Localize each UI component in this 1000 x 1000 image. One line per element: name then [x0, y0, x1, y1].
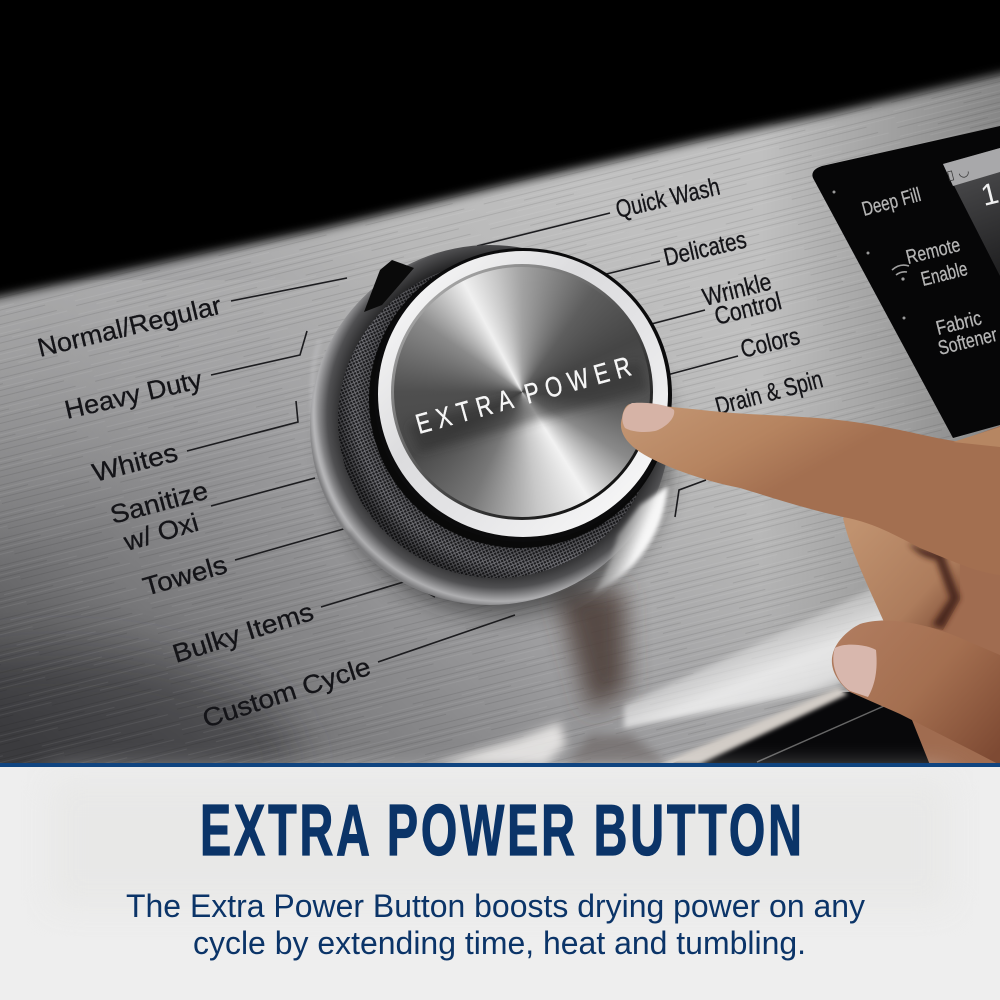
photo: washer control panel — [0, 66, 1000, 763]
bright lower band — [624, 585, 892, 728]
description: cycle by extending time, heat and tumbling. — [193, 925, 806, 961]
knurled body — [338, 262, 656, 578]
extra power dial — [310, 245, 672, 615]
black background with soft edge over the panel — [0, 0, 1000, 314]
lower finger — [832, 621, 1000, 765]
knuckle crease — [908, 543, 960, 628]
cycle labels right — [613, 173, 826, 421]
label leader lines — [187, 213, 738, 662]
chrome ring — [378, 251, 668, 537]
navy rule — [0, 763, 1000, 767]
dial base — [310, 245, 670, 605]
caption section background — [0, 767, 1000, 1000]
lower fingernail — [833, 645, 877, 697]
lower trim — [660, 688, 1000, 765]
cycle labels right: Colors — [738, 322, 803, 364]
cycle labels left: Heavy Duty — [62, 364, 205, 425]
cycle labels right: Delicates — [661, 226, 749, 272]
screen labels — [860, 184, 1000, 360]
index fingernail — [622, 403, 674, 432]
cycle labels left — [34, 290, 374, 734]
hand top edge — [953, 427, 1000, 447]
screen labels: Enable — [919, 258, 970, 291]
cycle labels left: w/ Oxi — [119, 507, 202, 557]
black lip under ring — [369, 250, 671, 548]
wifi icon — [892, 265, 909, 280]
index finger — [621, 404, 1000, 575]
cycle labels left: Custom Cycle — [199, 651, 374, 734]
dark fold at the bottom — [566, 735, 665, 765]
outer black ring — [374, 248, 672, 542]
lower left highlight — [432, 722, 566, 765]
back of hand — [880, 426, 1000, 765]
indicator dots — [832, 190, 906, 320]
dial text: EXTRA POWER — [412, 349, 641, 440]
control screen — [812, 126, 1000, 438]
screen labels: Fabric — [934, 307, 984, 340]
status icons: ▯ ◡ — [945, 164, 971, 184]
middle finger — [843, 511, 960, 630]
screen labels: Remote — [904, 234, 963, 269]
cycle labels left: Normal/Regular — [34, 290, 225, 363]
dial soft shadow — [330, 285, 670, 615]
base left edge highlight — [312, 340, 350, 530]
brushed metal dial face — [394, 267, 650, 517]
cycle labels right: Control — [712, 287, 784, 331]
description — [126, 888, 865, 961]
cycle labels right: Drain & Spin — [712, 365, 826, 421]
cycle labels right: Wrinkle — [700, 268, 774, 312]
inner dark ring — [391, 264, 653, 520]
dark band behind text — [408, 362, 648, 452]
cycle labels left: Bulky Items — [169, 596, 317, 669]
cycle labels left: Sanitize — [107, 475, 211, 530]
mottled texture — [50, 778, 950, 908]
pointer notch — [364, 260, 414, 312]
cycle labels right: Quick Wash — [613, 173, 723, 224]
description: The Extra Power Button boosts drying power on any — [126, 888, 865, 924]
hand pressing the dial — [621, 403, 1000, 765]
cycle labels left: Whites — [89, 437, 181, 488]
screen labels: Deep Fill — [860, 184, 923, 221]
shadow streak under dial — [555, 590, 628, 712]
cycle labels left: Towels — [139, 549, 230, 602]
right crescent reflection — [592, 486, 668, 594]
title: EXTRA POWER BUTTON — [200, 790, 802, 870]
